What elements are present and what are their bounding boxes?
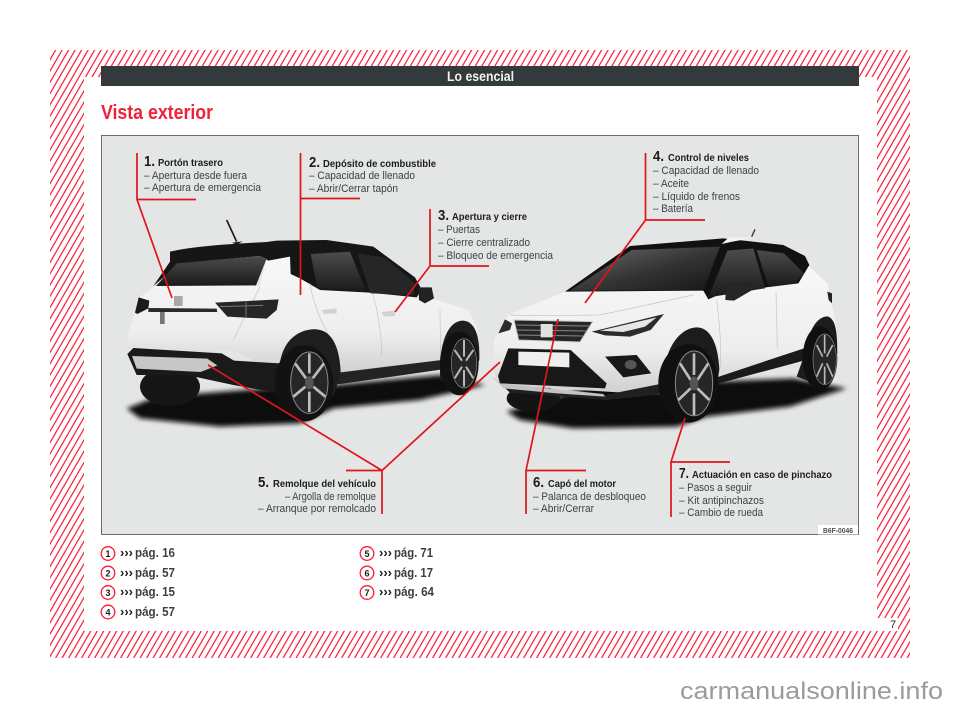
callout 3: Apertura y cierre: Apertura y cierre — [452, 211, 527, 223]
reference 2: ››› — [120, 565, 133, 580]
callout 3: Apertura y cierre — [395, 207, 554, 312]
callout 5: Remolque del vehículo: Remolque del vehículo — [273, 478, 376, 490]
callout 3: Apertura y cierre: 3. — [438, 207, 449, 224]
callout 3: Apertura y cierre: – Bloqueo de emergencia — [438, 250, 554, 262]
callout 1: Portón trasero — [137, 153, 262, 298]
hatched page frame — [50, 50, 910, 658]
car: rear three-quarter view — [127, 220, 485, 427]
panel: vehicle exterior diagram — [102, 136, 858, 535]
reference 1 — [101, 545, 175, 560]
callout 6: Capó del motor — [526, 319, 646, 515]
callout 4: Control de niveles: Control de niveles — [668, 152, 749, 164]
reference 1: ››› — [120, 545, 133, 560]
reference 4: ››› — [120, 604, 133, 619]
reference 3: ››› — [120, 584, 133, 599]
callout 4: Control de niveles: – Líquido de frenos — [653, 191, 740, 203]
reference 3: pág. 15 — [135, 585, 175, 599]
callout 2: Depósito de combustible: Depósito de combustible — [323, 158, 436, 170]
page references: left column — [101, 545, 175, 619]
figure code: B6F-0046 — [823, 526, 853, 535]
callout 5: Remolque del vehículo — [208, 362, 500, 515]
reference 1: 1 — [105, 549, 111, 559]
callout 4: Control de niveles: 4. — [653, 148, 664, 165]
reference 2: 2 — [105, 568, 111, 578]
page references: right column — [360, 545, 434, 599]
callout 2: Depósito de combustible: – Capacidad de llenado — [309, 170, 415, 182]
callout 1: Portón trasero: Portón trasero — [158, 157, 223, 169]
callout 4: Control de niveles — [585, 148, 759, 303]
reference 6 — [360, 565, 433, 580]
callout 6: Capó del motor: 6. — [533, 474, 544, 491]
reference 6: ››› — [379, 565, 392, 580]
reference 5: pág. 71 — [394, 546, 433, 560]
callout 3: Apertura y cierre: – Cierre centralizado — [438, 237, 530, 249]
callout 7: Actuación en caso de pinchazo: Actuación en caso de pinchazo — [692, 469, 832, 481]
reference 7: 7 — [364, 588, 370, 598]
title: Vista exterior — [101, 102, 213, 124]
callout 5: Remolque del vehículo: 5. — [258, 474, 269, 491]
car: front three-quarter view — [493, 229, 847, 428]
callout 3: Apertura y cierre: – Puertas — [438, 224, 480, 236]
callout 7: Actuación en caso de pinchazo: – Cambio de rueda — [679, 507, 764, 519]
callout 6: Capó del motor: Capó del motor — [548, 478, 616, 490]
callout 1: Portón trasero: – Apertura desde fuera — [144, 170, 248, 182]
callout 7: Actuación en caso de pinchazo: 7. — [679, 465, 689, 482]
callout 1: Portón trasero: – Apertura de emergencia — [144, 182, 262, 194]
reference 4 — [101, 604, 175, 619]
reference 7: pág. 64 — [394, 585, 434, 599]
section header bar: Lo esencial — [447, 69, 514, 84]
callout 2: Depósito de combustible: – Abrir/Cerrar tapón — [309, 183, 398, 195]
reference 3: 3 — [105, 588, 111, 598]
callout 5: Remolque del vehículo: – Argolla de remolque — [285, 491, 376, 503]
reference 6: 6 — [364, 568, 370, 578]
callout 2: Depósito de combustible: 2. — [309, 154, 320, 171]
reference 7: ››› — [379, 584, 392, 599]
reference 2: pág. 57 — [135, 566, 175, 580]
section header bar — [101, 66, 859, 86]
reference 1: pág. 16 — [135, 546, 175, 560]
reference 2 — [101, 565, 175, 580]
callout 6: Capó del motor: – Palanca de desbloqueo — [533, 491, 646, 503]
callout 1: Portón trasero: 1. — [144, 153, 155, 170]
reference 4: 4 — [105, 608, 111, 618]
reference 5: ››› — [379, 545, 392, 560]
callout 4: Control de niveles: – Batería — [653, 203, 694, 215]
page number: 7 — [890, 619, 896, 631]
reference 6: pág. 17 — [394, 566, 433, 580]
callout 6: Capó del motor: – Abrir/Cerrar — [533, 503, 594, 515]
callout 5: Remolque del vehículo: – Arranque por remolcado — [258, 503, 376, 515]
reference 3 — [101, 584, 175, 599]
callout 7: Actuación en caso de pinchazo — [671, 418, 832, 519]
callout 4: Control de niveles: – Capacidad de llenado — [653, 165, 759, 177]
reference 5: 5 — [364, 549, 370, 559]
callout 7: Actuación en caso de pinchazo: – Kit antipinchazos — [679, 495, 764, 507]
reference 4: pág. 57 — [135, 605, 175, 619]
callout 4: Control de niveles: – Aceite — [653, 178, 689, 190]
reference 7 — [360, 584, 434, 599]
reference 5 — [360, 545, 433, 560]
watermark: carmanualsonline.info — [680, 678, 943, 705]
callout 7: Actuación en caso de pinchazo: – Pasos a seguir — [679, 482, 752, 494]
callout 2: Depósito de combustible — [300, 153, 436, 295]
